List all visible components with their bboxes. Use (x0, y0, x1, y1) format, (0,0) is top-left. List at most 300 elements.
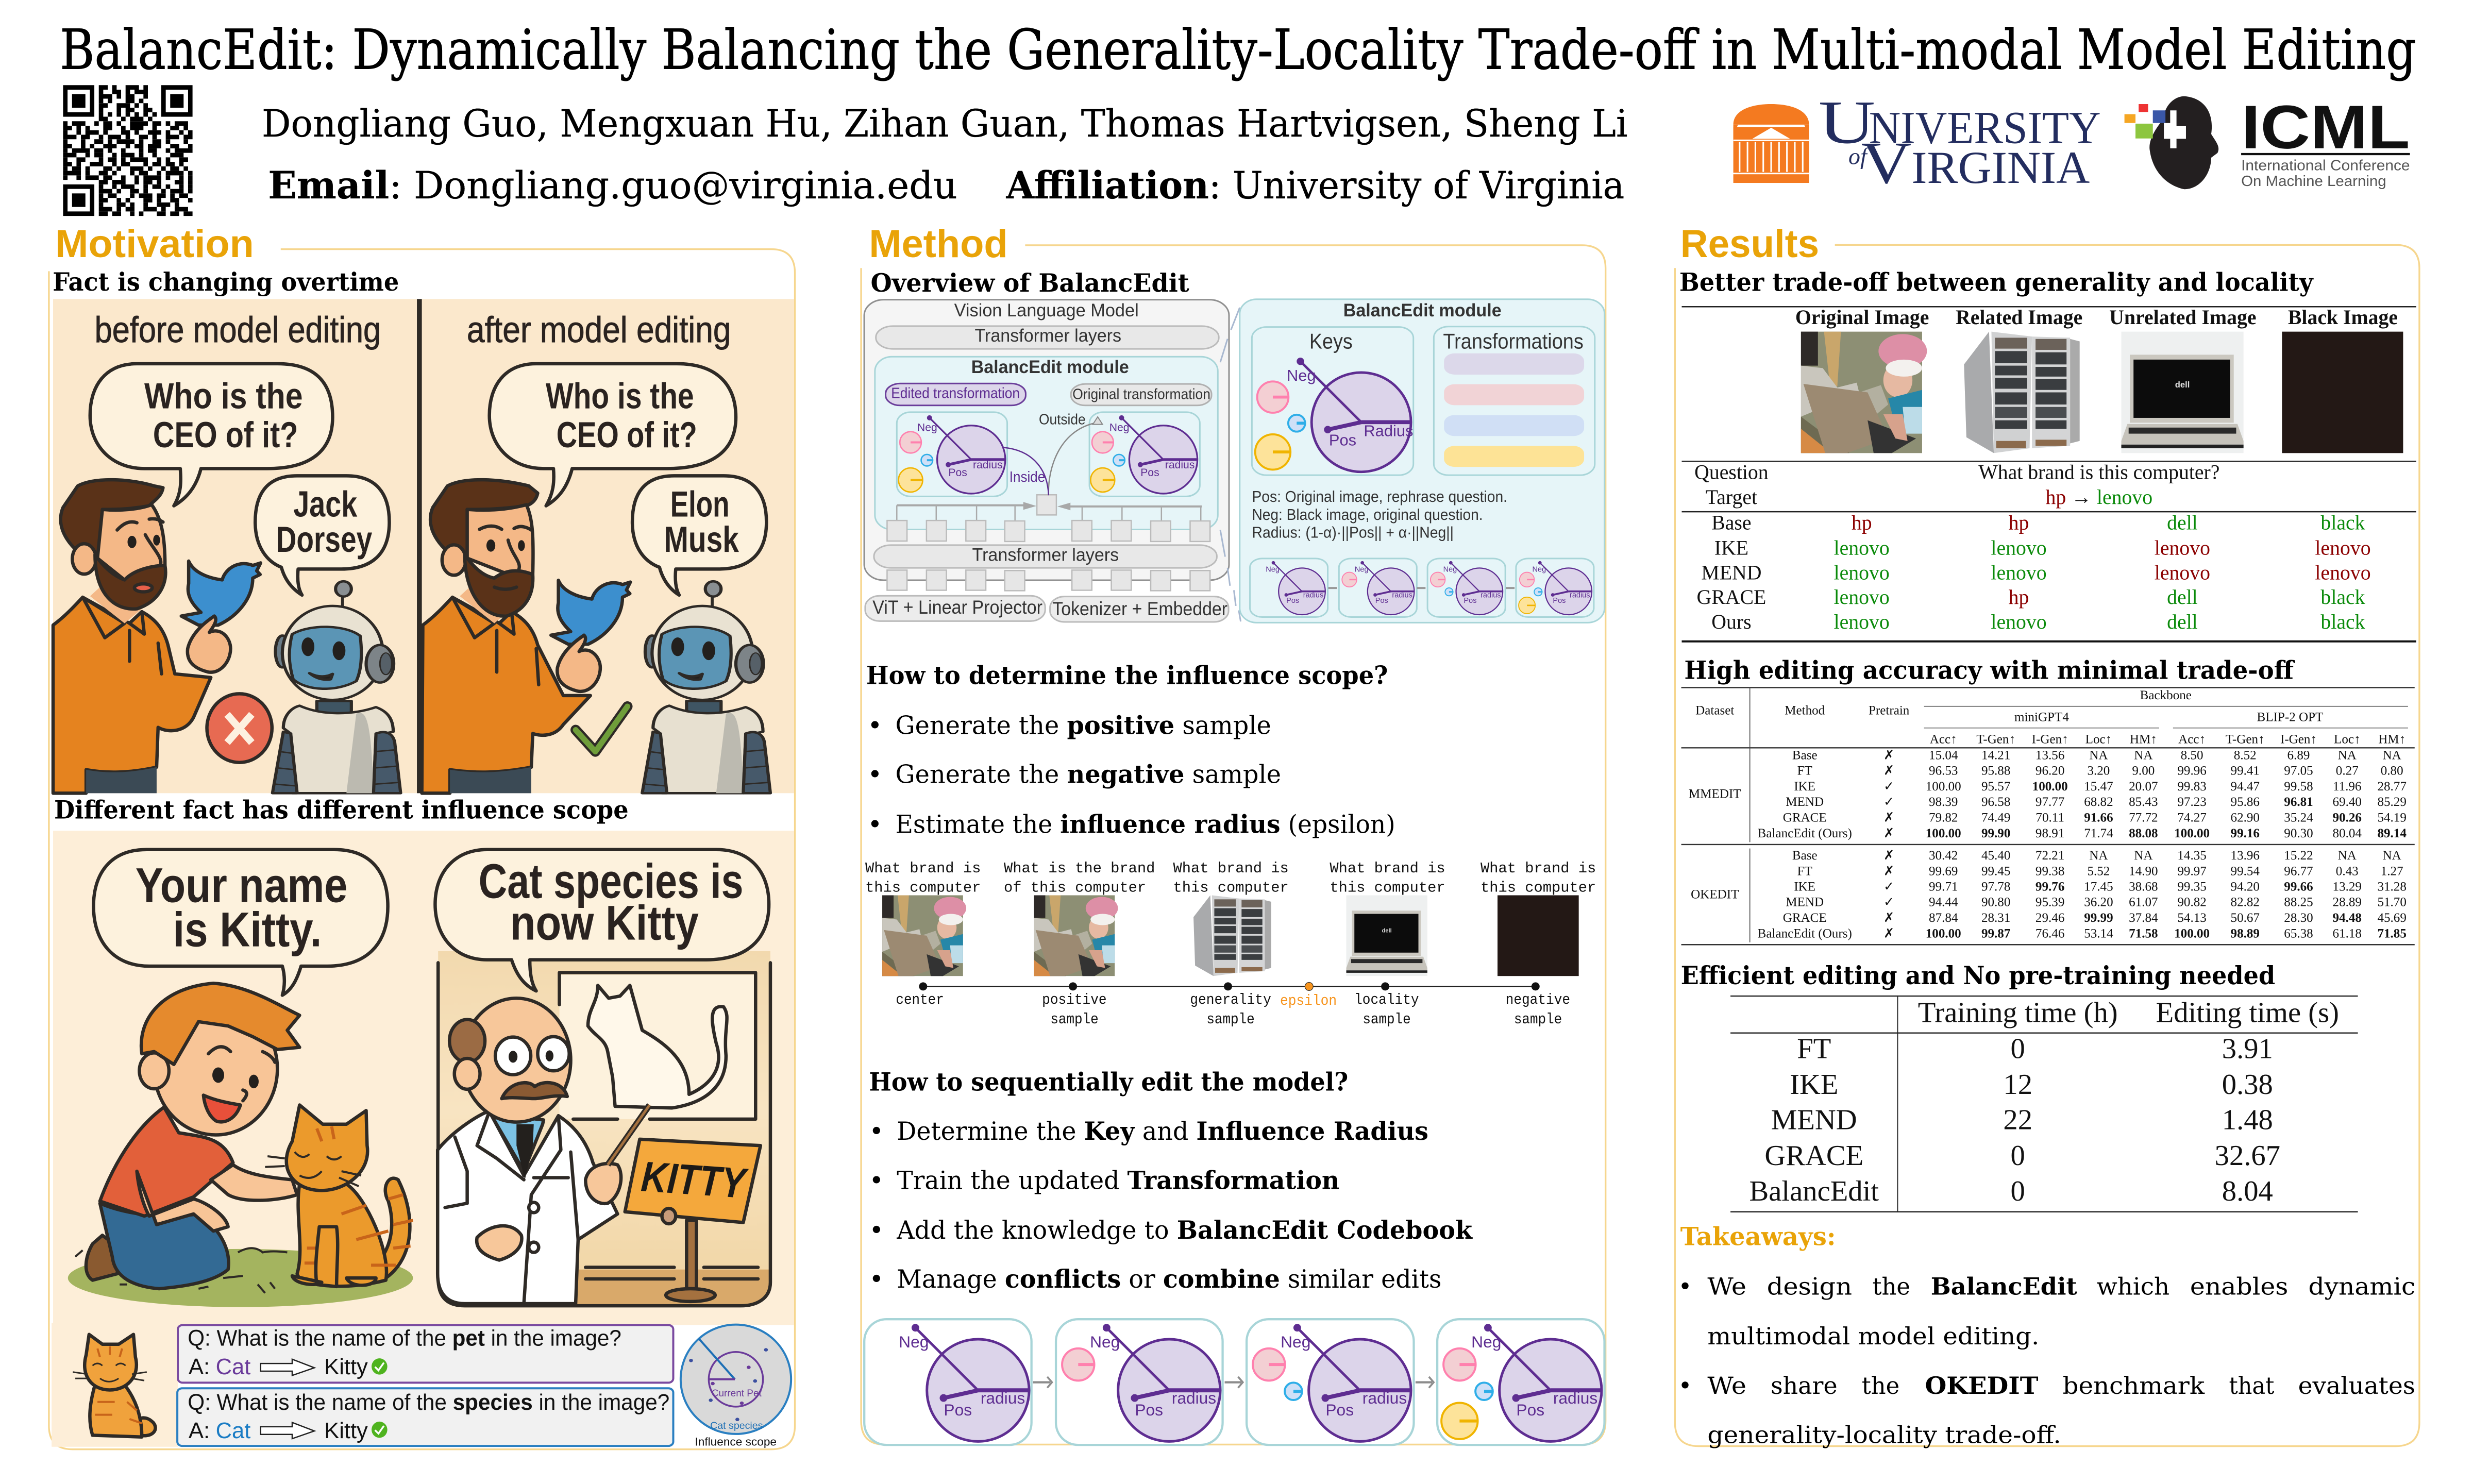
table: timing: FT (1797, 1033, 1831, 1065)
table: timing: MEND (1771, 1104, 1857, 1136)
table: quantitative accuracy: 0.27 (2336, 764, 2359, 778)
figure: sample spectrum: sample (1362, 1011, 1411, 1028)
text: takeaways list: We (1707, 1273, 1746, 1301)
table: quantitative accuracy: 45.40 (1981, 849, 2010, 863)
table: timing: 32.67 (2215, 1140, 2280, 1172)
key sequence: module: Pos (1375, 597, 1388, 605)
table: quantitative accuracy: 62.90 (2231, 811, 2260, 825)
table: quantitative accuracy: 100.00 (1926, 827, 1961, 840)
table: quantitative accuracy: ✗ (1883, 864, 1894, 878)
table: qualitative comparison: dell (2175, 380, 2190, 390)
table: timing: 0 (2011, 1033, 2025, 1065)
table: quantitative accuracy: 3.20 (2087, 764, 2110, 778)
table: qualitative comparison: lenovo (2155, 561, 2210, 584)
table: quantitative accuracy: 100.00 (2032, 780, 2068, 794)
figure: sample spectrum: What brand is (1330, 860, 1445, 877)
table: quantitative accuracy: 95.88 (1981, 764, 2010, 778)
key sequence: module: Pos (1463, 597, 1476, 605)
bullets: sequential edit (869, 1116, 1473, 1294)
table: quantitative accuracy: 71.85 (2377, 927, 2407, 941)
diagram labels: vision language model: Vision Language Model (954, 300, 1139, 321)
text: takeaways list (1678, 1273, 2415, 1448)
table: quantitative accuracy: 74.49 (1981, 811, 2010, 825)
table: quantitative accuracy: 28.30 (2284, 911, 2313, 925)
table: quantitative accuracy: ✗ (1883, 811, 1894, 825)
table: qualitative comparison: Original Image (1795, 306, 1929, 329)
table: quantitative accuracy: 28.31 (1981, 911, 2010, 925)
diagram labels: vision language model: Edited transformation (891, 385, 1020, 401)
table: qualitative comparison: black (2320, 611, 2365, 633)
question box: species: A: (189, 1419, 210, 1443)
key: edited transformation: Pos (948, 467, 967, 479)
table: quantitative accuracy: ✗ (1883, 764, 1894, 778)
table: quantitative accuracy: T-Gen↑ (1976, 733, 2015, 747)
table: qualitative comparison: Question (1694, 461, 1769, 483)
bullets: influence scope: • (867, 810, 882, 839)
table: quantitative accuracy: GRACE (1783, 811, 1827, 825)
table: quantitative accuracy: 99.87 (1981, 927, 2010, 941)
text: takeaways list: OKEDIT (1925, 1372, 2039, 1399)
text: takeaways list: which (2097, 1273, 2169, 1301)
table: quantitative accuracy: 50.67 (2231, 911, 2260, 925)
logo: University of Virginia (1734, 88, 2101, 196)
table: quantitative accuracy: Backbone (2140, 688, 2192, 702)
table: qualitative comparison (1682, 306, 2416, 642)
heading: takeaways: Takeaways: (1680, 1221, 1836, 1251)
question box: species (188, 1390, 669, 1443)
comic 2 text (136, 854, 750, 1207)
table: qualitative comparison: lenovo (1834, 561, 1890, 584)
table: quantitative accuracy: 28.77 (2377, 780, 2407, 794)
table: quantitative accuracy: Loc↑ (2085, 733, 2112, 747)
figure: sample spectrum (865, 860, 1596, 1028)
bullets: influence scope: Generate the positive sample (895, 711, 1271, 740)
influence scope labels: Influence scope (695, 1435, 777, 1448)
table: quantitative accuracy: 45.69 (2377, 911, 2407, 925)
question box: pet: Kitty (324, 1355, 368, 1379)
table: qualitative comparison: lenovo (1834, 536, 1890, 559)
table: quantitative accuracy: 65.38 (2284, 927, 2313, 941)
table: quantitative accuracy: BalancEdit (Ours) (1758, 827, 1852, 840)
bullets: sequential edit: Manage conflicts or combine similar edits (897, 1264, 1441, 1294)
table: quantitative accuracy: Base (1792, 749, 1818, 763)
table: qualitative comparison: black (2320, 511, 2365, 534)
text: takeaways list: the (1873, 1273, 1910, 1301)
table: quantitative accuracy: 30.42 (1929, 849, 1958, 863)
table: timing: 0.38 (2222, 1069, 2273, 1101)
figure: sample spectrum: sample (1514, 1011, 1562, 1028)
table: quantitative accuracy: 82.82 (2231, 896, 2260, 909)
table: quantitative accuracy: 0.43 (2336, 864, 2359, 878)
affiliation: Affiliation: University of Virginia (1006, 163, 1624, 208)
table: quantitative accuracy: 9.00 (2132, 764, 2155, 778)
figure: sample spectrum: negative (1506, 991, 1570, 1008)
table: quantitative accuracy: 14.90 (2129, 864, 2158, 878)
table: quantitative accuracy: NA (2338, 849, 2357, 863)
table: quantitative accuracy: ✗ (1883, 911, 1894, 925)
table: quantitative accuracy: 87.84 (1929, 911, 1958, 925)
question box: pet (188, 1326, 621, 1379)
diagram labels: vision language model: Original transformation (1072, 386, 1210, 402)
table: quantitative accuracy: 94.44 (1929, 896, 1958, 909)
figure: sample spectrum: positive (1042, 991, 1107, 1008)
table: quantitative accuracy: 1.27 (2381, 864, 2403, 878)
diagram labels: vision language model: Transformer layers (974, 326, 1121, 346)
subheading: fact changing: Fact is changing overtime (53, 267, 399, 297)
table: quantitative accuracy: ✓ (1883, 880, 1894, 894)
table: quantitative accuracy: 98.91 (2035, 827, 2064, 840)
influence scope labels: Cat species (710, 1420, 763, 1431)
table: qualitative comparison: What brand is this computer? (1978, 461, 2219, 483)
text: takeaways list: multimodal model editing. (1707, 1322, 2039, 1350)
table: quantitative accuracy: ✓ (1883, 795, 1894, 809)
table: quantitative accuracy: 11.96 (2333, 780, 2362, 794)
bullets: sequential edit: Train the updated Transformation (897, 1166, 1339, 1195)
table: quantitative accuracy: 37.84 (2129, 911, 2158, 925)
table: quantitative accuracy: 79.82 (1929, 811, 1958, 825)
table: quantitative accuracy: 98.39 (1929, 795, 1958, 809)
table: quantitative accuracy: 61.07 (2129, 896, 2158, 909)
authors: Dongliang Guo, Mengxuan Hu, Zihan Guan, Thomas Hartvigsen, Sheng Li (262, 102, 1628, 146)
table: timing: 0 (2011, 1175, 2025, 1207)
key sequence: codebook growth: Pos (944, 1401, 972, 1419)
table: timing: IKE (1790, 1069, 1838, 1101)
table: quantitative accuracy: 20.07 (2129, 780, 2158, 794)
text: takeaways list: enables (2190, 1273, 2288, 1301)
subheading: efficient editing: Efficient editing and No pre-training needed (1681, 960, 2275, 990)
comic 2 text: KITTY (640, 1152, 750, 1207)
key sequence: codebook growth: Neg (1090, 1333, 1120, 1351)
table: quantitative accuracy: GRACE (1783, 911, 1827, 925)
key sequence: codebook growth: Neg (1281, 1333, 1310, 1351)
table: quantitative accuracy: 99.41 (2231, 764, 2260, 778)
table: quantitative accuracy: 14.35 (2177, 849, 2207, 863)
figure: sample spectrum: generality (1190, 991, 1271, 1008)
bullets: sequential edit: • (869, 1216, 884, 1245)
table: quantitative accuracy: FT (1797, 864, 1812, 878)
table: quantitative accuracy: NA (2089, 749, 2108, 763)
table: quantitative accuracy: miniGPT4 (2014, 710, 2069, 724)
comic text: Dorsey (276, 519, 372, 560)
figure: sample spectrum: this computer (1173, 880, 1289, 897)
module labels: BalancEdit module (1343, 300, 1502, 321)
key sequence: module: Neg (1443, 566, 1457, 574)
table: qualitative comparison: hp (1852, 511, 1872, 534)
question box: species: Cat (216, 1419, 250, 1443)
comic text: Who is the (144, 376, 303, 416)
figure: sample spectrum: sample (1050, 1011, 1099, 1028)
bullets: influence scope: Estimate the influence radius (epsilon) (895, 810, 1395, 839)
table: quantitative accuracy: 89.14 (2377, 827, 2407, 840)
table: qualitative comparison: lenovo (2315, 561, 2371, 584)
key: original transformation (1090, 415, 1198, 494)
table: quantitative accuracy: 0.80 (2381, 764, 2403, 778)
table: timing: 3.91 (2222, 1033, 2273, 1065)
table: quantitative accuracy: MEND (1786, 896, 1824, 909)
table: quantitative accuracy: 94.47 (2231, 780, 2260, 794)
logo: University of Virginia: U (1819, 88, 1875, 156)
table: quantitative accuracy: 96.20 (2035, 764, 2064, 778)
logo: University of Virginia: IRGINIA (1911, 143, 2090, 193)
table: quantitative accuracy: 96.58 (1981, 795, 2010, 809)
table: qualitative comparison: GRACE (1697, 586, 1766, 609)
question box: species: Q: What is the name of the species in the image? (188, 1390, 669, 1415)
panel: motivation (49, 222, 795, 1449)
table: quantitative accuracy: 69.40 (2333, 795, 2362, 809)
key: large: Radius (1364, 421, 1413, 440)
table: quantitative accuracy: HM↑ (2378, 733, 2405, 747)
figure: sample spectrum: this computer (1330, 880, 1445, 897)
comic text: CEO of it? (557, 414, 697, 455)
key sequence: codebook growth (864, 1319, 1605, 1445)
logo: University of Virginia: V (1861, 130, 1911, 196)
figure: sample spectrum: center (896, 991, 944, 1008)
key: original transformation: radius (1165, 459, 1195, 471)
table: quantitative accuracy: 99.83 (2177, 780, 2207, 794)
heading: Motivation: Motivation (55, 222, 254, 266)
key: edited transformation: Neg (917, 421, 937, 433)
key sequence: module: radius (1303, 591, 1323, 599)
table: quantitative accuracy: 8.52 (2234, 749, 2257, 763)
comic text: before model editing (95, 309, 381, 350)
comic text: Who is the (546, 376, 694, 416)
figure: sample spectrum: this computer (865, 880, 981, 897)
comic: before and after model editing (53, 299, 794, 793)
table: quantitative accuracy: 98.89 (2231, 927, 2260, 941)
diagram: vision language model (864, 300, 1241, 622)
table: quantitative accuracy: 99.35 (2177, 880, 2207, 894)
table: timing: BalancEdit (1749, 1175, 1879, 1207)
table: quantitative accuracy: 71.58 (2129, 927, 2158, 941)
text: takeaways list: that (2229, 1372, 2275, 1399)
table: timing: 12 (2003, 1069, 2032, 1101)
diagram labels: vision language model: ViT + Linear Projector (872, 597, 1042, 618)
subheading: influence scope: Different fact has different influence scope (54, 795, 629, 824)
bullets: influence scope: Generate the negative sample (895, 760, 1281, 789)
bullets: sequential edit: • (869, 1166, 884, 1195)
table: quantitative accuracy: Loc↑ (2334, 733, 2361, 747)
table: quantitative accuracy: 99.66 (2284, 880, 2313, 894)
table: quantitative accuracy: BalancEdit (Ours) (1758, 927, 1852, 941)
module labels: Transformations (1443, 329, 1584, 353)
table: timing: 22 (2003, 1104, 2032, 1136)
table: quantitative accuracy: NA (2383, 749, 2401, 763)
text: takeaways list: generality-locality trade-off. (1707, 1421, 2061, 1448)
table: qualitative comparison: black (2320, 586, 2365, 609)
key: original transformation: Neg (1109, 421, 1130, 433)
table: quantitative accuracy: 100.00 (2174, 827, 2210, 840)
table: quantitative accuracy: 13.29 (2333, 880, 2362, 894)
table: quantitative accuracy: 6.89 (2287, 749, 2310, 763)
table: quantitative accuracy: 71.74 (2084, 827, 2113, 840)
table: quantitative accuracy: 94.48 (2333, 911, 2362, 925)
logo: ICML: International Conference (2241, 158, 2410, 174)
bullets: influence scope: • (867, 711, 882, 740)
table: qualitative comparison: Ours (1711, 611, 1752, 633)
table: quantitative accuracy: 68.82 (2084, 795, 2113, 809)
table: quantitative accuracy: 80.04 (2333, 827, 2362, 840)
question box: pet: A: (189, 1355, 210, 1379)
key sequence: codebook growth: radius (1172, 1389, 1216, 1407)
table: qualitative comparison: dell (2167, 511, 2198, 534)
table: quantitative accuracy: NA (2134, 849, 2152, 863)
table: timing: Editing time (s) (2156, 997, 2339, 1029)
module labels (1252, 300, 1584, 542)
text: takeaways list: dynamic (2308, 1273, 2415, 1301)
subheading: better trade-off: Better trade-off between generality and locality (1679, 267, 2314, 297)
table: quantitative accuracy: 35.24 (2284, 811, 2313, 825)
table: quantitative accuracy: 99.96 (2177, 764, 2207, 778)
question box: species: Kitty (324, 1419, 368, 1443)
key: edited transformation: radius (973, 459, 1003, 471)
diagram labels: vision language model (872, 300, 1227, 619)
question box: pet: Cat (216, 1355, 250, 1379)
key sequence: module: radius (1570, 591, 1590, 599)
table: quantitative accuracy: 99.76 (2035, 880, 2064, 894)
table: qualitative comparison: MEND (1701, 561, 1761, 584)
table: quantitative accuracy: 88.08 (2129, 827, 2158, 840)
table: quantitative accuracy: Acc↑ (2178, 733, 2206, 747)
table: qualitative comparison: Unrelated Image (2109, 306, 2257, 329)
table: quantitative accuracy: 99.99 (2084, 911, 2113, 925)
table: quantitative accuracy: 99.69 (1929, 864, 1958, 878)
table: quantitative accuracy: 77.72 (2129, 811, 2158, 825)
logo: ICML: ICML (2241, 93, 2410, 162)
key sequence: codebook growth: Pos (1135, 1401, 1163, 1419)
bullets: sequential edit: Determine the Key and Influence Radius (897, 1116, 1428, 1146)
key: original transformation: Pos (1140, 467, 1159, 479)
comic text: CEO of it? (153, 414, 298, 455)
table: quantitative accuracy: ✗ (1883, 849, 1894, 863)
key sequence: module: Neg (1266, 566, 1280, 574)
key sequence: module: Neg (1355, 566, 1368, 574)
table: quantitative accuracy: Method (1785, 703, 1825, 717)
diagram labels: vision language model: BalancEdit module (971, 357, 1129, 377)
key sequence: module: Pos (1286, 597, 1299, 605)
table: quantitative accuracy: 90.30 (2284, 827, 2313, 840)
table: quantitative accuracy: 97.78 (1981, 880, 2010, 894)
table: qualitative comparison: lenovo (1834, 611, 1890, 633)
table: quantitative accuracy: 91.66 (2084, 811, 2113, 825)
table: qualitative comparison: hp (2009, 586, 2029, 609)
table: quantitative accuracy: 28.89 (2333, 896, 2362, 909)
table: quantitative accuracy: 13.96 (2231, 849, 2260, 863)
table: quantitative accuracy: 85.29 (2377, 795, 2407, 809)
email: Email: Dongliang.guo@virginia.edu (268, 163, 957, 208)
bullets: influence scope: • (867, 760, 882, 789)
table: quantitative accuracy: 90.80 (1981, 896, 2010, 909)
table: quantitative accuracy: MMEDIT (1689, 787, 1741, 801)
key sequence: codebook growth: radius (1362, 1389, 1407, 1407)
table: quantitative accuracy: IKE (1794, 780, 1815, 794)
comic text: Elon (670, 484, 730, 525)
small cat (73, 1335, 156, 1437)
key sequence: module: Neg (1533, 566, 1546, 574)
figure: sample spectrum: this computer (1481, 880, 1596, 897)
table: quantitative accuracy: 99.16 (2231, 827, 2260, 840)
table: qualitative comparison: hp (2009, 511, 2029, 534)
comic 2 text: is Kitty. (173, 902, 322, 957)
bullets: sequential edit: • (869, 1264, 884, 1294)
table: quantitative accuracy: 99.45 (1981, 864, 2010, 878)
table: quantitative accuracy: 53.14 (2084, 927, 2113, 941)
module labels: Radius: (1-α)·||Pos|| + α·||Neg|| (1252, 524, 1454, 542)
table: quantitative accuracy: 29.46 (2035, 911, 2064, 925)
table: quantitative accuracy: NA (2338, 749, 2357, 763)
text: takeaways list: We (1707, 1372, 1746, 1399)
subheading: high accuracy: High editing accuracy with minimal trade-off (1684, 655, 2295, 685)
panel: method (861, 222, 1606, 1445)
figure: sample spectrum: What brand is (1173, 860, 1289, 877)
figure: sample spectrum: What brand is (865, 860, 981, 877)
heading: Results: Results (1680, 222, 1819, 266)
table: qualitative comparison: lenovo (2155, 536, 2210, 559)
table: quantitative accuracy: ✗ (1883, 749, 1894, 763)
influence scope diagram (681, 1325, 791, 1434)
scene: boy with cat (68, 983, 413, 1307)
diagram labels: vision language model: Tokenizer + Embedder (1052, 598, 1227, 619)
key: edited transformation (899, 415, 1005, 494)
table: quantitative accuracy: T-Gen↑ (2226, 733, 2265, 747)
key sequence: codebook growth: radius (981, 1389, 1025, 1407)
table: quantitative accuracy: 88.25 (2284, 896, 2313, 909)
table: quantitative accuracy: NA (2134, 749, 2152, 763)
table: quantitative accuracy: 15.47 (2084, 780, 2113, 794)
table: quantitative accuracy: 54.19 (2377, 811, 2407, 825)
table: quantitative accuracy: FT (1797, 764, 1812, 778)
table: qualitative comparison: lenovo (1991, 536, 2047, 559)
table: quantitative accuracy: 97.05 (2284, 764, 2313, 778)
figure: sample spectrum: epsilon (1280, 992, 1337, 1009)
text: takeaways list: design (1767, 1273, 1852, 1301)
table: quantitative accuracy: 99.38 (2035, 864, 2064, 878)
table: quantitative accuracy: 95.39 (2035, 896, 2064, 909)
module labels: Pos: Original image, rephrase question. (1252, 488, 1507, 505)
table: quantitative accuracy: 96.77 (2284, 864, 2313, 878)
table: qualitative comparison: Base (1711, 511, 1752, 534)
panel: results (1675, 222, 2419, 1448)
table: quantitative accuracy: NA (2383, 849, 2401, 863)
key sequence: module (1266, 561, 1592, 615)
comic text: Jack (293, 484, 358, 525)
table: quantitative accuracy: 13.56 (2035, 749, 2064, 763)
influence scope labels: Current Pet (712, 1388, 762, 1399)
diagram labels: vision language model: Outside (1039, 411, 1086, 428)
table: qualitative comparison: lenovo (1834, 586, 1890, 609)
table: timing: GRACE (1764, 1140, 1863, 1172)
table: quantitative accuracy: Base (1792, 849, 1818, 863)
table: quantitative accuracy: I-Gen↑ (2032, 733, 2068, 747)
table: qualitative comparison: lenovo (1991, 561, 2047, 584)
figure: sample spectrum: sample (1206, 1011, 1255, 1028)
key: large: Pos (1329, 431, 1356, 449)
diagram: BalancEdit module detail (1240, 299, 1605, 622)
table: qualitative comparison: IKE (1714, 536, 1748, 559)
table: quantitative accuracy: 97.23 (2177, 795, 2207, 809)
table: quantitative accuracy: 90.26 (2333, 811, 2362, 825)
table: quantitative accuracy: 96.81 (2284, 795, 2313, 809)
table: quantitative accuracy: 99.90 (1981, 827, 2010, 840)
bullets: sequential edit: Add the knowledge to BalancEdit Codebook (896, 1215, 1473, 1245)
table: quantitative accuracy: ✓ (1883, 896, 1894, 909)
module labels: Keys (1309, 329, 1353, 353)
key: large (1255, 358, 1413, 472)
text: takeaways list: • (1678, 1273, 1692, 1301)
table: quantitative accuracy: 99.97 (2177, 864, 2207, 878)
logo: ICML (2125, 93, 2410, 190)
table: quantitative accuracy: I-Gen↑ (2280, 733, 2317, 747)
table: qualitative comparison: Related Image (1956, 306, 2082, 329)
